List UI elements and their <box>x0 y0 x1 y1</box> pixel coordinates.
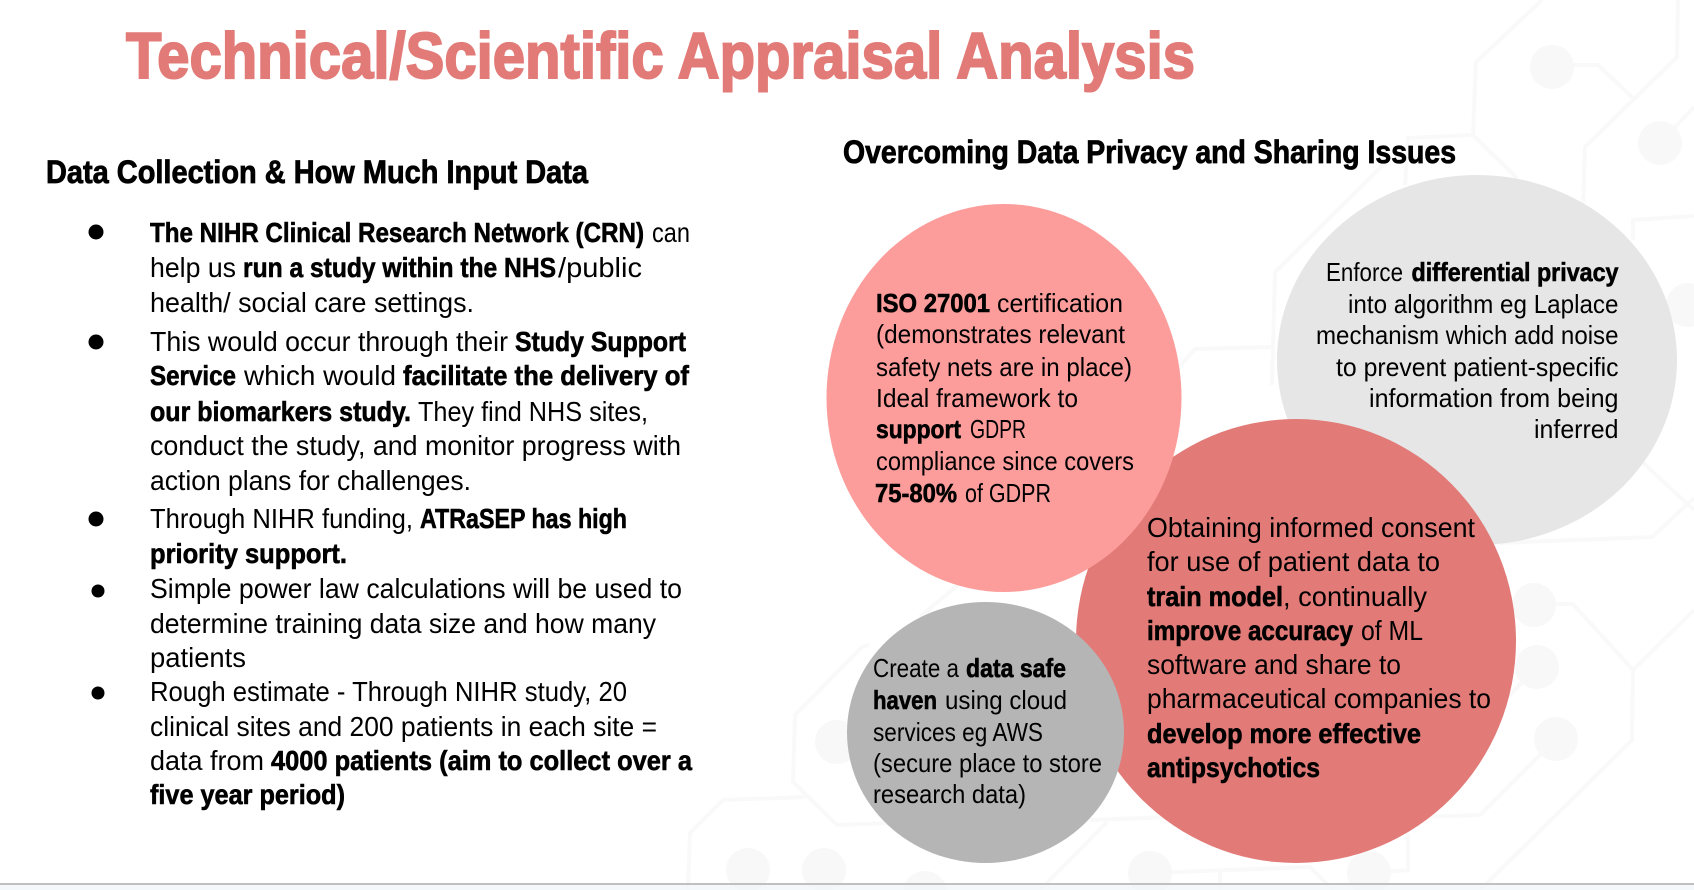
bullet 3: Through NIHR funding, <box>150 503 413 534</box>
circle: informed consent: Obtaining informed consent <box>1147 512 1475 543</box>
circle: data safe haven <box>847 602 1124 863</box>
panel: data collection <box>46 154 692 810</box>
bullet 5: Rough estimate - Through NIHR study, 20 <box>150 676 627 707</box>
bullet 2: action plans for challenges. <box>150 465 471 496</box>
bullet 4 <box>92 573 682 673</box>
circle: ISO 27001: certification <box>997 288 1123 318</box>
bullet 2: They find NHS sites, <box>418 396 648 427</box>
circle: ISO 27001: GDPR <box>970 414 1026 444</box>
bottom rule and strip <box>0 883 1694 890</box>
circle: differential privacy: information from being <box>1369 383 1618 413</box>
circle: ISO 27001: Ideal framework to <box>876 383 1078 413</box>
bullet 2: conduct the study, and monitor progress with <box>150 430 681 461</box>
circle: informed consent: , continually <box>1283 581 1427 612</box>
circle: ISO 27001: 75-80% <box>875 478 957 508</box>
bullet 5: clinical sites and 200 patients in each site = <box>150 711 657 742</box>
bullet 1: help us <box>150 252 236 283</box>
bullet 5: data from <box>150 745 264 776</box>
circle: informed consent: for use of patient data to <box>1147 546 1440 577</box>
circle: ISO 27001: ISO 27001 <box>876 288 990 318</box>
circle: data safe haven: Create a <box>873 653 959 683</box>
circle: informed consent: antipsychotics <box>1147 752 1320 783</box>
bullet 4: patients <box>150 642 246 673</box>
bullet 2: our biomarkers study. <box>150 396 411 427</box>
circle: differential privacy <box>1277 175 1677 545</box>
circle: informed consent: develop more effective <box>1147 718 1421 749</box>
bullet 3: priority support. <box>150 538 347 569</box>
bullet 1 <box>88 217 690 318</box>
circle: data safe haven: research data) <box>873 779 1026 809</box>
circle: informed consent: train model <box>1147 581 1283 612</box>
circle: differential privacy: mechanism which add noise <box>1316 320 1618 350</box>
heading: data collection: Data Collection & How Much Input Data <box>46 154 588 190</box>
bullet 1: run a study within the NHS <box>243 252 556 283</box>
circle: ISO 27001 <box>826 204 1182 592</box>
circle: informed consent: pharmaceutical companies to <box>1147 683 1491 714</box>
bullet 3 <box>88 503 627 569</box>
circle: informed consent: improve accuracy <box>1147 615 1353 646</box>
circle: informed consent <box>1076 419 1516 863</box>
bullet 1: health/ social care settings. <box>150 287 474 318</box>
circle: differential privacy: inferred <box>1534 414 1618 444</box>
circle: data safe haven: using cloud <box>945 685 1067 715</box>
bullet 2: facilitate the delivery of <box>403 360 690 391</box>
bullet 2: which would <box>243 360 396 391</box>
circle: ISO 27001: support <box>876 414 961 444</box>
circle: data safe haven: data safe <box>966 653 1066 683</box>
circle: differential privacy: to prevent patient-specific <box>1336 352 1618 382</box>
bullet 2: This would occur through their <box>150 326 508 357</box>
bullet 4: determine training data size and how many <box>150 608 656 639</box>
bullet 1: The NIHR Clinical Research Network (CRN) <box>150 217 644 248</box>
title: Technical/Scientific Appraisal Analysis <box>126 19 1195 92</box>
heading: data privacy: Overcoming Data Privacy and Sharing Issues <box>843 134 1456 170</box>
bullet 5: five year period) <box>150 779 345 810</box>
circle: differential privacy: Enforce <box>1326 257 1403 287</box>
circle: differential privacy: into algorithm eg Laplace <box>1348 289 1618 319</box>
circle: ISO 27001: safety nets are in place) <box>876 352 1132 382</box>
bullet 1: can <box>652 217 690 248</box>
bullet 2 <box>88 326 690 496</box>
bullet 1: /public <box>558 252 642 283</box>
bullet 3: ATRaSEP has high <box>420 503 627 534</box>
circle: informed consent: software and share to <box>1147 649 1401 680</box>
bullet 5 <box>92 676 692 810</box>
circle: ISO 27001: (demonstrates relevant <box>876 319 1126 349</box>
bullet 4: Simple power law calculations will be used to <box>150 573 682 604</box>
circle: informed consent: of ML <box>1361 615 1423 646</box>
background circuit pattern <box>688 0 1694 890</box>
bullet 2: Service <box>150 360 236 391</box>
bullet 5: 4000 patients (aim to collect over a <box>271 745 692 776</box>
circle: ISO 27001: compliance since covers <box>876 446 1134 476</box>
bullet 2: Study Support <box>515 326 686 357</box>
circle: differential privacy: differential privacy <box>1412 257 1619 287</box>
circle: data safe haven: services eg AWS <box>873 717 1043 747</box>
circle: ISO 27001: of GDPR <box>965 478 1051 508</box>
circle: data safe haven: haven <box>873 685 937 715</box>
circle: data safe haven: (secure place to store <box>873 748 1102 778</box>
